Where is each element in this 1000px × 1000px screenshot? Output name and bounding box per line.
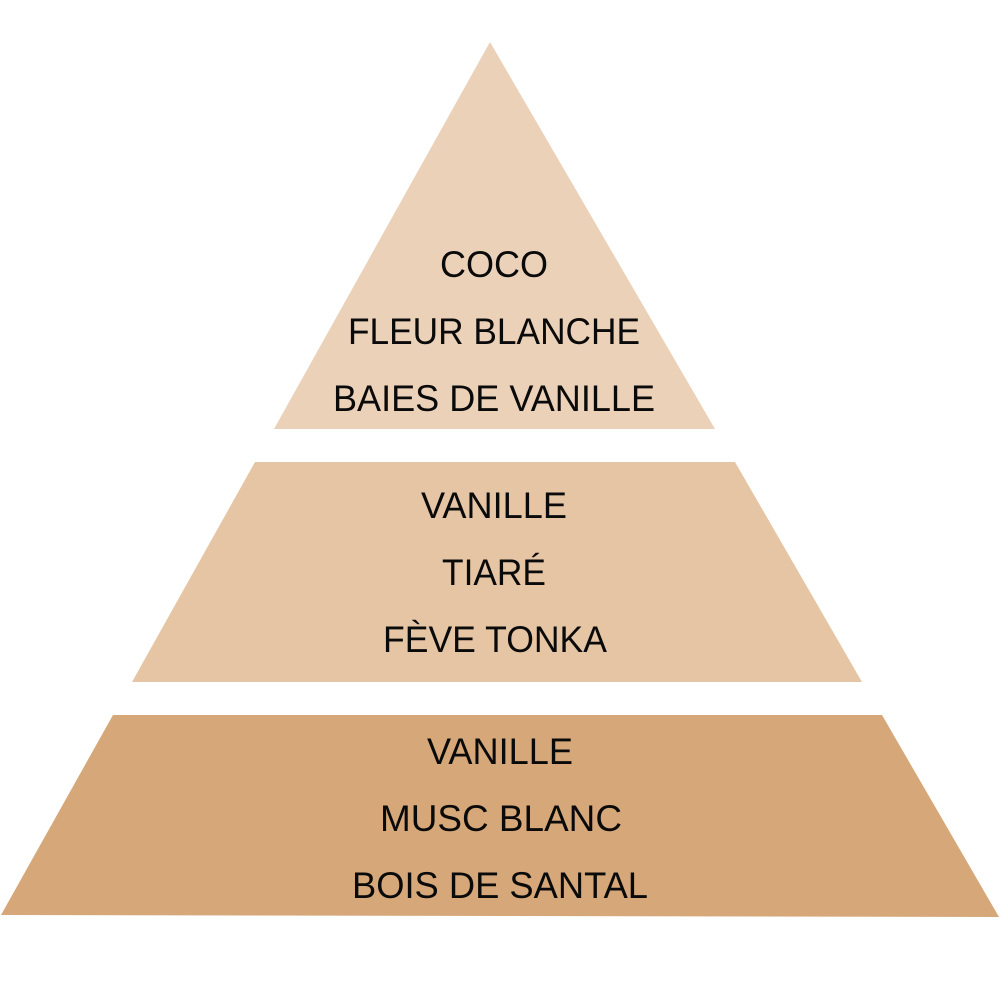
middle tier label: vanille: VANILLE xyxy=(421,485,567,526)
bottom tier label: bois de santal: BOIS DE SANTAL xyxy=(352,865,648,906)
top tier label: coco: COCO xyxy=(440,244,548,285)
top tier label: fleur blanche: FLEUR BLANCHE xyxy=(348,311,640,352)
middle tier label: feve tonka: FÈVE TONKA xyxy=(383,619,607,660)
bottom tier label: vanille: VANILLE xyxy=(427,731,573,772)
panel: middle tier xyxy=(132,462,862,682)
panel: bottom tier xyxy=(1,715,999,917)
panel: top tier xyxy=(274,42,715,429)
bottom tier label: musc blanc: MUSC BLANC xyxy=(380,798,622,839)
middle tier label: tiare: TIARÉ xyxy=(442,552,546,593)
top tier label: baies de vanille: BAIES DE VANILLE xyxy=(333,378,655,419)
